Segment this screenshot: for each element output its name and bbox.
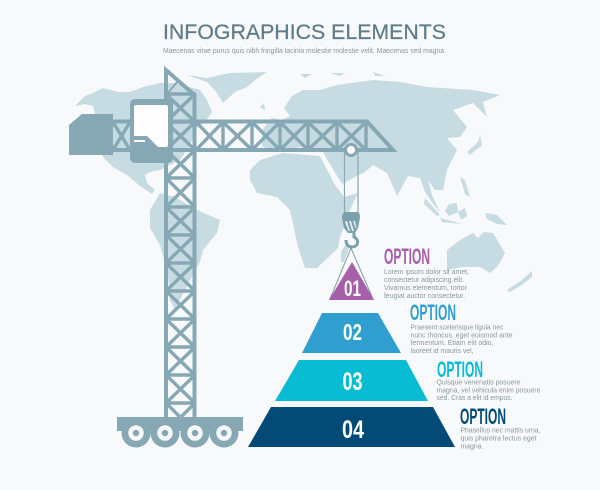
option 04 text: quis pharetra lectus eget [460,434,537,442]
option 03 text: magna, vel vehicula enim posuere [436,386,540,394]
counterweight [69,114,113,155]
option 03 text: Quisque venenatis posuere [436,378,520,386]
option 01 text: feugiat auctor consectetur. [384,291,465,300]
option 03 text: sed. Cras a elit id empus. [436,393,512,402]
pyramid tier 02 [302,313,401,353]
pyramid tier 02: 02 [343,319,362,345]
crane jib [113,121,393,150]
crane tower [164,70,196,417]
title: INFOGRAPHICS ELEMENTS [163,21,446,44]
option 01 text [384,244,469,300]
pyramid tier 04: 04 [342,416,364,444]
option 01 text: consectetur adipiscing elit. [384,275,464,284]
option 02 text: OPTION [410,300,456,325]
option 02 text: nunc rhoncus, eget euismod ante [410,330,512,340]
option 02 text: fermentum. Etiam elit odio, [410,338,494,347]
option 01 text: Lorem ipsum dolor sit amet, [384,267,469,276]
option 01 text: Vivamus elementum, tortor [384,283,467,292]
option 02 text: laoreet id mauris vel, [410,346,474,355]
crane cab [130,99,173,163]
option 01 text: OPTION [384,244,430,269]
world map [75,72,532,310]
option 03 text: OPTION [437,357,483,382]
option 04 text: Phasellus nec mattis urna, [460,426,540,434]
option 02 text: Praesent scelerisque ligula nec [410,322,504,332]
pyramid tier 01 [329,262,374,301]
sling [330,248,373,299]
option 04 text [460,404,540,450]
option 04 text: magna. [460,442,484,450]
crane [113,70,393,417]
crane base with wheels [117,417,243,448]
pyramid tier 04 [248,407,455,447]
pyramid tier 03: 03 [342,368,362,396]
pulley and ropes [344,144,358,214]
option 02 text [410,300,512,355]
icon: crane hook [342,212,360,247]
pyramid tier 03 [275,360,428,401]
option 04 text: OPTION [460,404,506,429]
pyramid tier 01: 01 [344,276,361,301]
option 03 text [436,357,540,402]
subtitle: Maecenas vitae purus quis nibh fringilla lacinia molestie molestie velit. Maecenas sed magna. [163,48,446,55]
